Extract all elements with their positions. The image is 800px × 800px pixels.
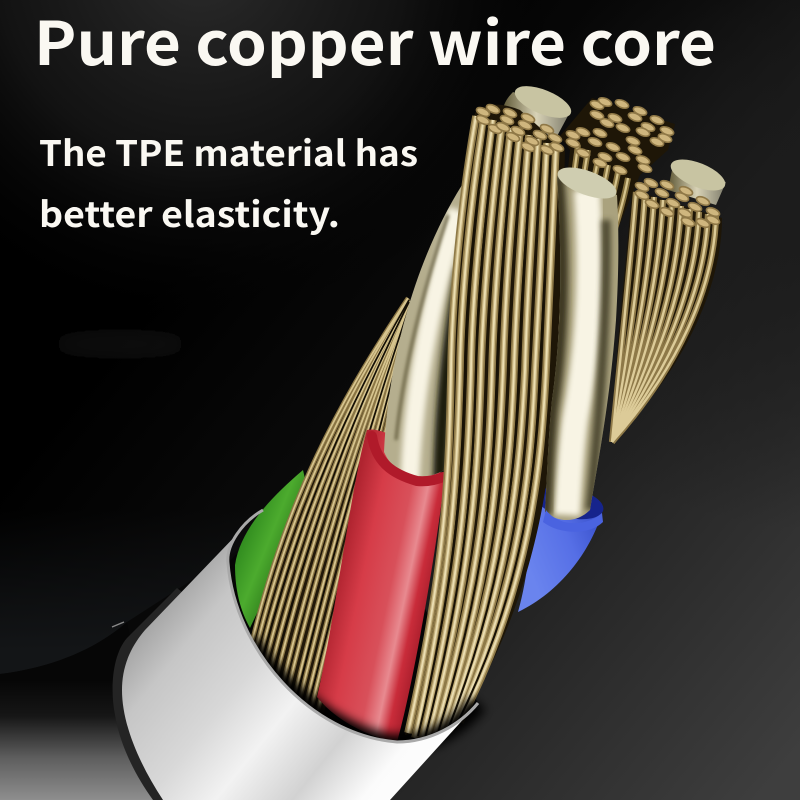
black cable body, upper left	[0, 510, 300, 674]
grey floor glow, lower left	[0, 622, 170, 800]
description text: better elasticity.	[39, 187, 340, 238]
cable outer dark band	[113, 588, 240, 800]
small silver core, right	[667, 153, 729, 205]
description text	[39, 126, 418, 238]
inner shadow along the cable rim	[250, 640, 478, 745]
cable glint	[112, 622, 124, 627]
small silver core, top	[503, 80, 575, 140]
red wire	[317, 430, 444, 742]
white core inside red wire	[384, 186, 462, 476]
red wire lip	[372, 436, 443, 481]
white cable sheath	[122, 510, 478, 800]
main front copper bundle	[405, 103, 565, 738]
right copper bundle	[612, 177, 722, 442]
left copper bundle	[250, 298, 414, 730]
description text: The TPE material has	[39, 126, 418, 177]
blue wire	[518, 481, 606, 612]
large silver core, front	[545, 168, 618, 520]
blue wire lip	[543, 510, 603, 532]
cable opening interior	[228, 510, 478, 742]
back copper bundle	[541, 96, 675, 420]
green wire	[235, 470, 310, 628]
